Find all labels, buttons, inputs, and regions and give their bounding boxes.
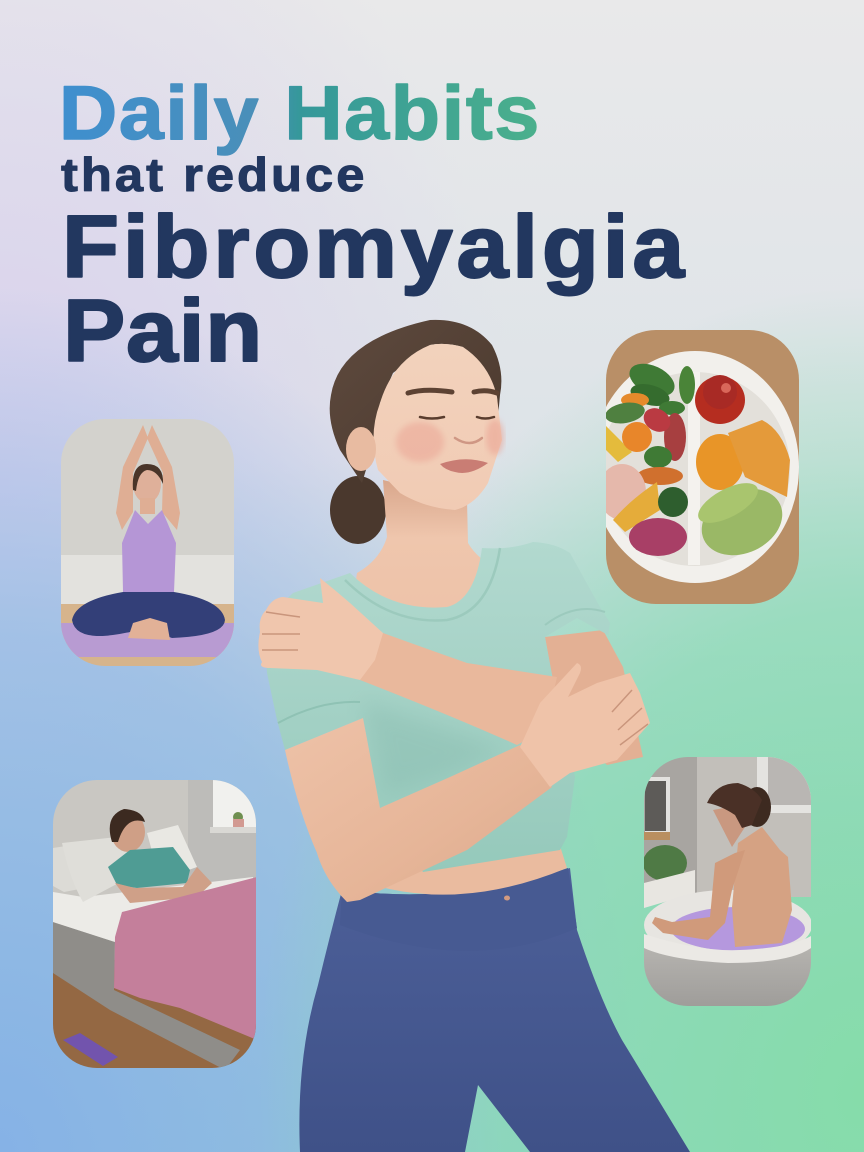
- pants: [299, 868, 690, 1152]
- face: [373, 344, 502, 510]
- main figure: woman hugging her shoulders: [258, 320, 690, 1152]
- title line: Fibromyalgia: Fibromyalgia: [62, 198, 685, 296]
- hand on elbow: [520, 663, 650, 787]
- ear: [346, 427, 376, 471]
- cheek blush right: [486, 419, 504, 455]
- forearm across chest: [360, 633, 557, 745]
- sleeve hem left: [278, 702, 360, 723]
- closed eyes: [420, 417, 494, 418]
- title: [59, 70, 685, 380]
- finger separators: [262, 612, 300, 650]
- panel: yoga photo: [61, 419, 234, 666]
- bare midriff: [385, 846, 567, 895]
- navel: [504, 896, 510, 900]
- hair: [330, 320, 501, 483]
- hand on shoulder: [258, 578, 383, 680]
- upper arm and lower forearm: [285, 718, 552, 902]
- shirt chest shading: [362, 700, 505, 795]
- pants waistband: [340, 868, 577, 951]
- shirt collar: [345, 548, 500, 620]
- hair bun: [330, 476, 386, 544]
- title line: that reduce: that reduce: [61, 150, 364, 202]
- neck and chest: [350, 480, 500, 625]
- panel: food plate photo: [591, 330, 799, 604]
- panel: resting in bed photo: [53, 780, 257, 1070]
- shirt: [266, 542, 610, 872]
- title line: Daily Habits: Daily Habits: [59, 70, 539, 155]
- eyebrows: [408, 390, 497, 393]
- title line: Pain: Pain: [63, 282, 262, 380]
- cheek blush: [396, 422, 444, 462]
- far arm: [545, 630, 643, 765]
- finger separators: [612, 690, 648, 745]
- panel: bath photo: [643, 757, 812, 1006]
- smile: [440, 459, 488, 473]
- sleeve hem right: [545, 609, 605, 625]
- nose: [455, 438, 482, 443]
